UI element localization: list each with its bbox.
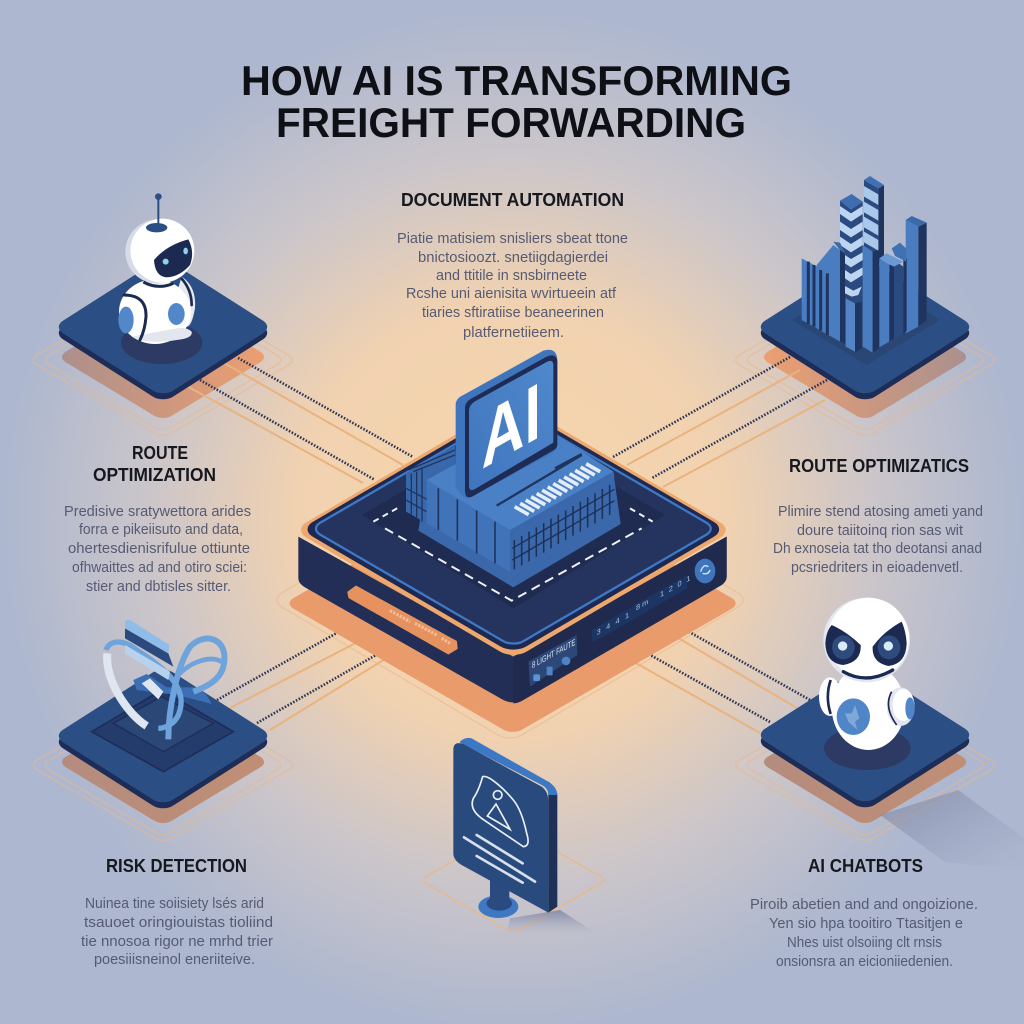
device readout strip bbox=[592, 573, 692, 643]
sign ground outline bbox=[420, 827, 607, 933]
text block: route optimization left: ROUTE bbox=[132, 443, 188, 463]
robot head bbox=[125, 193, 194, 286]
text block: AI chatbots: Piroib abetien and and ongoizione. bbox=[750, 897, 978, 913]
warehouse building bbox=[406, 435, 621, 587]
text block: document automation: Rcshe uni aienisita wvirtueein atf bbox=[406, 286, 617, 302]
text block: document automation bbox=[397, 190, 628, 341]
text block: route optimization left: OPTIMIZATION bbox=[93, 465, 216, 485]
text block: document automation: platfernetiieem. bbox=[463, 325, 564, 341]
text block: document automation: bnictosioozt. snetiigdagierdei bbox=[418, 250, 608, 266]
device round button bbox=[695, 559, 715, 583]
mid striped tower bbox=[840, 194, 863, 303]
text block: route optimization left: Predisive sratywettora arides bbox=[64, 504, 251, 520]
left tower block bbox=[802, 242, 845, 344]
platform underlays with outlines bbox=[29, 282, 999, 843]
text block: risk detection: poesiiisneinol eneriiteive. bbox=[94, 952, 255, 968]
text block: route optimizatics right: doure taiitoinq rion sas wit bbox=[797, 523, 963, 539]
text block: route optimization left: forra e pikeiisuto and data, bbox=[79, 522, 243, 538]
text block: document automation: and ttitile in snsbirneete bbox=[436, 268, 587, 284]
title: FREIGHT FORWARDING bbox=[276, 99, 746, 146]
AI screen: AI bbox=[482, 364, 541, 486]
orange underlay bbox=[284, 472, 741, 735]
text block: route optimization left: stier and dbtisles sitter. bbox=[86, 579, 231, 595]
icon: risk detection ribbon bbox=[92, 620, 233, 772]
text block: route optimizatics right bbox=[773, 456, 983, 576]
icon: bar chart city towers bbox=[792, 176, 940, 365]
connector lines bbox=[185, 355, 827, 733]
chatbot head bbox=[823, 598, 910, 682]
text block: document automation: Piatie matisiem snisliers sbeat ttone bbox=[397, 231, 628, 247]
text block: route optimizatics right: ROUTE OPTIMIZATICS bbox=[789, 456, 969, 476]
text block: document automation: DOCUMENT AUTOMATION bbox=[401, 190, 624, 210]
text block: route optimization left: ofhwaittes ad and otiro sciei: bbox=[72, 560, 247, 576]
text block: risk detection bbox=[81, 856, 273, 968]
text block: AI chatbots: Nhes uist olsoiing clt rnsis bbox=[787, 935, 942, 951]
front towers bbox=[846, 243, 907, 353]
text block: risk detection: tsauoet oringiouistas tioliind bbox=[84, 915, 273, 931]
text block: route optimization left: ohertesdienisrifulue ottiunte bbox=[68, 541, 250, 557]
chatbot body bbox=[819, 665, 915, 750]
device readout strip: 3 4 4 1 bbox=[597, 609, 631, 637]
orange status panel bbox=[348, 587, 457, 653]
text block: AI chatbots: AI CHATBOTS bbox=[808, 856, 923, 876]
platform: bottom right robot bbox=[755, 665, 975, 811]
robot body bbox=[118, 277, 195, 344]
device top surface bbox=[293, 401, 733, 659]
device readout strip: 8 m bbox=[636, 597, 649, 613]
long shadow lower right bbox=[880, 790, 1024, 870]
sign text lines bbox=[464, 835, 535, 883]
platform: top left robot bbox=[53, 257, 273, 403]
text block: route optimizatics right: Plimire stend atosing ameti yand bbox=[778, 504, 983, 520]
text block: route optimizatics right: Dh exnoseia tat tho deotansi anad bbox=[773, 541, 982, 557]
text block: document automation: tiaries sftiratiise beaneerinen bbox=[422, 305, 604, 321]
text block: route optimizatics right: pcsriedriters in eioadenvetl. bbox=[791, 560, 963, 576]
text block: risk detection: RISK DETECTION bbox=[106, 856, 247, 876]
sign glyph bbox=[472, 776, 528, 847]
platform: bottom left bbox=[53, 666, 273, 812]
central AI device bbox=[284, 350, 741, 735]
device readout strip: 1 2 0 1 bbox=[660, 573, 692, 599]
text block: route optimization left bbox=[64, 443, 251, 595]
text block: risk detection: tie nnosoa rigor ne mrhd trier bbox=[81, 934, 273, 950]
text block: AI chatbots: onsionsra an eicioniiedenien. bbox=[776, 954, 953, 970]
text block: AI chatbots bbox=[750, 856, 978, 970]
dashed road bbox=[373, 508, 653, 601]
text block: risk detection: Nuinea tine soiisiety lsés arid bbox=[85, 896, 264, 912]
icon: chatbot robot bbox=[819, 598, 915, 770]
tall striped tower bbox=[864, 176, 884, 267]
text block: AI chatbots: Yen sio hpa tooitiro Ttasitjen e bbox=[769, 916, 963, 932]
AI screen bbox=[456, 350, 557, 498]
icon: robot top left bbox=[118, 193, 202, 364]
back right tower bbox=[906, 216, 927, 333]
platform: top right city bbox=[755, 257, 975, 403]
icon: warning sign bbox=[420, 738, 607, 933]
title bbox=[241, 57, 792, 146]
title: HOW AI IS TRANSFORMING bbox=[241, 57, 792, 104]
device body bbox=[298, 537, 727, 703]
device label plate bbox=[528, 635, 577, 687]
device label plate: 8 LIGHT FAUTE bbox=[532, 637, 575, 670]
